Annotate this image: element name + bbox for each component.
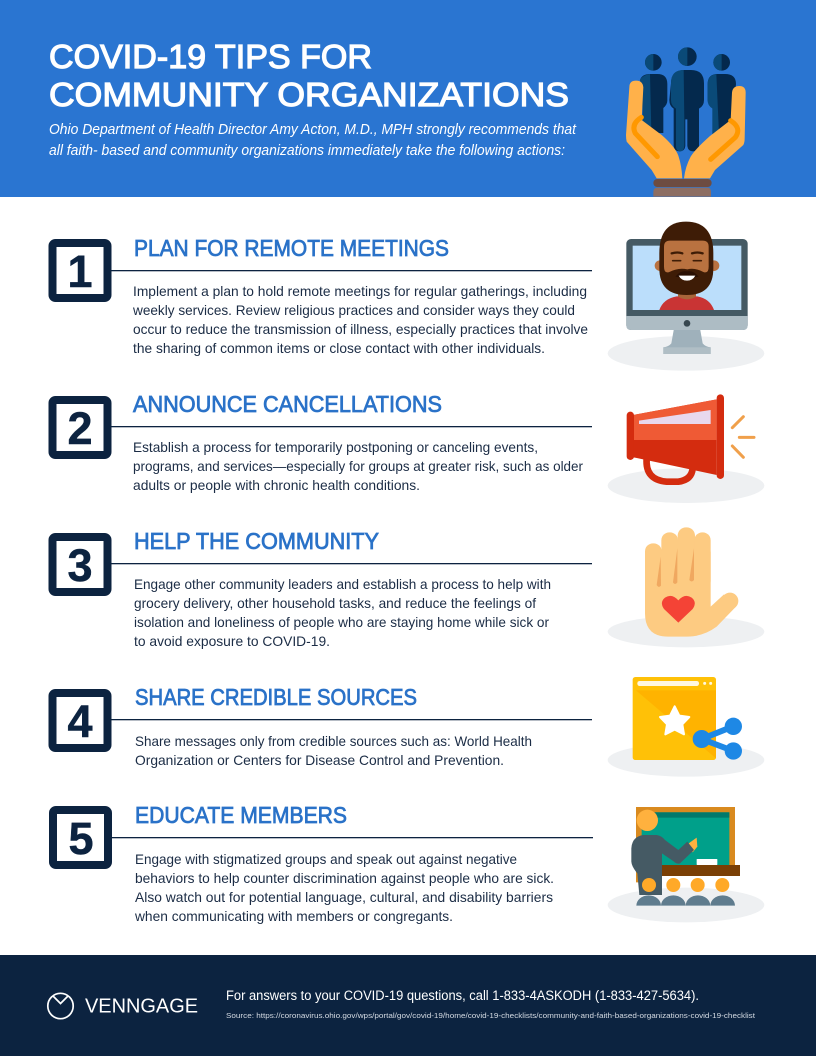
body text 3 [134, 577, 551, 649]
venngage logo [48, 993, 198, 1019]
intro text [49, 122, 577, 159]
body text 1: occur to reduce the transmission of illness, especially practices that involve [133, 322, 588, 337]
body text 2: Establish a process for temporarily postponing or canceling events, [133, 440, 538, 455]
body text 1: the sharing of common items or close contact with other individuals. [133, 341, 545, 356]
venngage logo: VENNGAGE [85, 994, 198, 1018]
number box 4 [52, 693, 108, 748]
heading 2: ANNOUNCE CANCELLATIONS [133, 391, 442, 417]
source line: Source: https://coronavirus.ohio.gov/wps/portal/gov/covid-19/home/covid-19-checklists/community-and-faith-based-organizations-covid-19-checklist [226, 1011, 756, 1020]
body text 4 [135, 734, 532, 768]
icon: megaphone [608, 394, 764, 503]
section 4: share credible sources [52, 677, 764, 777]
number box 5: 5 [68, 813, 94, 864]
heading 1: PLAN FOR REMOTE MEETINGS [134, 235, 449, 261]
body text 1: weekly services. Review religious practices and consider ways they could [132, 303, 575, 318]
heading 5: EDUCATE MEMBERS [135, 802, 347, 828]
icon: hands holding people [626, 47, 746, 197]
body text 3: to avoid exposure to COVID-19. [134, 634, 330, 649]
body text 2: adults or people with chronic health conditions. [133, 478, 420, 493]
heading 3: HELP THE COMMUNITY [134, 528, 379, 554]
number box 3: 3 [67, 540, 93, 591]
body text 3: isolation and loneliness of people who are staying home while sick or [134, 615, 549, 630]
body text 5: when communicating with members or congregants. [134, 909, 453, 924]
intro text: all faith- based and community organizations immediately take the following actions: [49, 143, 565, 159]
body text 1: Implement a plan to hold remote meetings for regular gatherings, including [133, 284, 587, 299]
title: COVID-19 TIPS FOR [49, 39, 372, 76]
intro text: Ohio Department of Health Director Amy Acton, M.D., MPH strongly recommends that [49, 122, 577, 138]
title [49, 39, 569, 114]
heading 4: SHARE CREDIBLE SOURCES [135, 684, 417, 710]
section 1: plan for remote meetings [52, 222, 764, 371]
number box 5 [53, 810, 108, 865]
number box 1: 1 [67, 246, 93, 297]
number box 2 [52, 400, 108, 455]
number box 1 [52, 243, 108, 298]
contact line: For answers to your COVID-19 questions, call 1-833-4ASKODH (1-833-427-5634). [226, 988, 699, 1003]
body text 4: Share messages only from credible sources such as: World Health [135, 734, 532, 749]
body text 5 [134, 852, 554, 924]
header banner [0, 0, 816, 197]
body text 1 [132, 284, 588, 356]
body text 2 [133, 440, 583, 493]
number box 3 [52, 537, 108, 592]
body text 5: Also watch out for potential language, cultural, and disability barriers [135, 890, 553, 905]
section 3: help the community [52, 527, 764, 649]
body text 3: Engage other community leaders and establish a process to help with [134, 577, 551, 592]
icon: hand with heart [608, 527, 764, 647]
icon: video call monitor [608, 222, 764, 371]
icon: browser window with share symbol [608, 677, 764, 777]
body text 5: behaviors to help counter discrimination against people who are sick. [135, 871, 554, 886]
body text 3: grocery delivery, other household tasks, and reduce the feelings of [134, 596, 536, 611]
footer [0, 955, 816, 1056]
icon: teacher at chalkboard [608, 807, 764, 922]
body text 4: Organization or Centers for Disease Control and Prevention. [135, 753, 504, 768]
body text 5: Engage with stigmatized groups and speak out against negative [135, 852, 517, 867]
section 5: educate members [53, 802, 764, 924]
section 2: announce cancellations [52, 391, 764, 503]
number box 2: 2 [67, 403, 93, 454]
number box 4: 4 [67, 696, 93, 747]
title: COMMUNITY ORGANIZATIONS [49, 77, 569, 114]
body text 2: programs, and services—especially for groups at greater risk, such as older [133, 459, 583, 474]
